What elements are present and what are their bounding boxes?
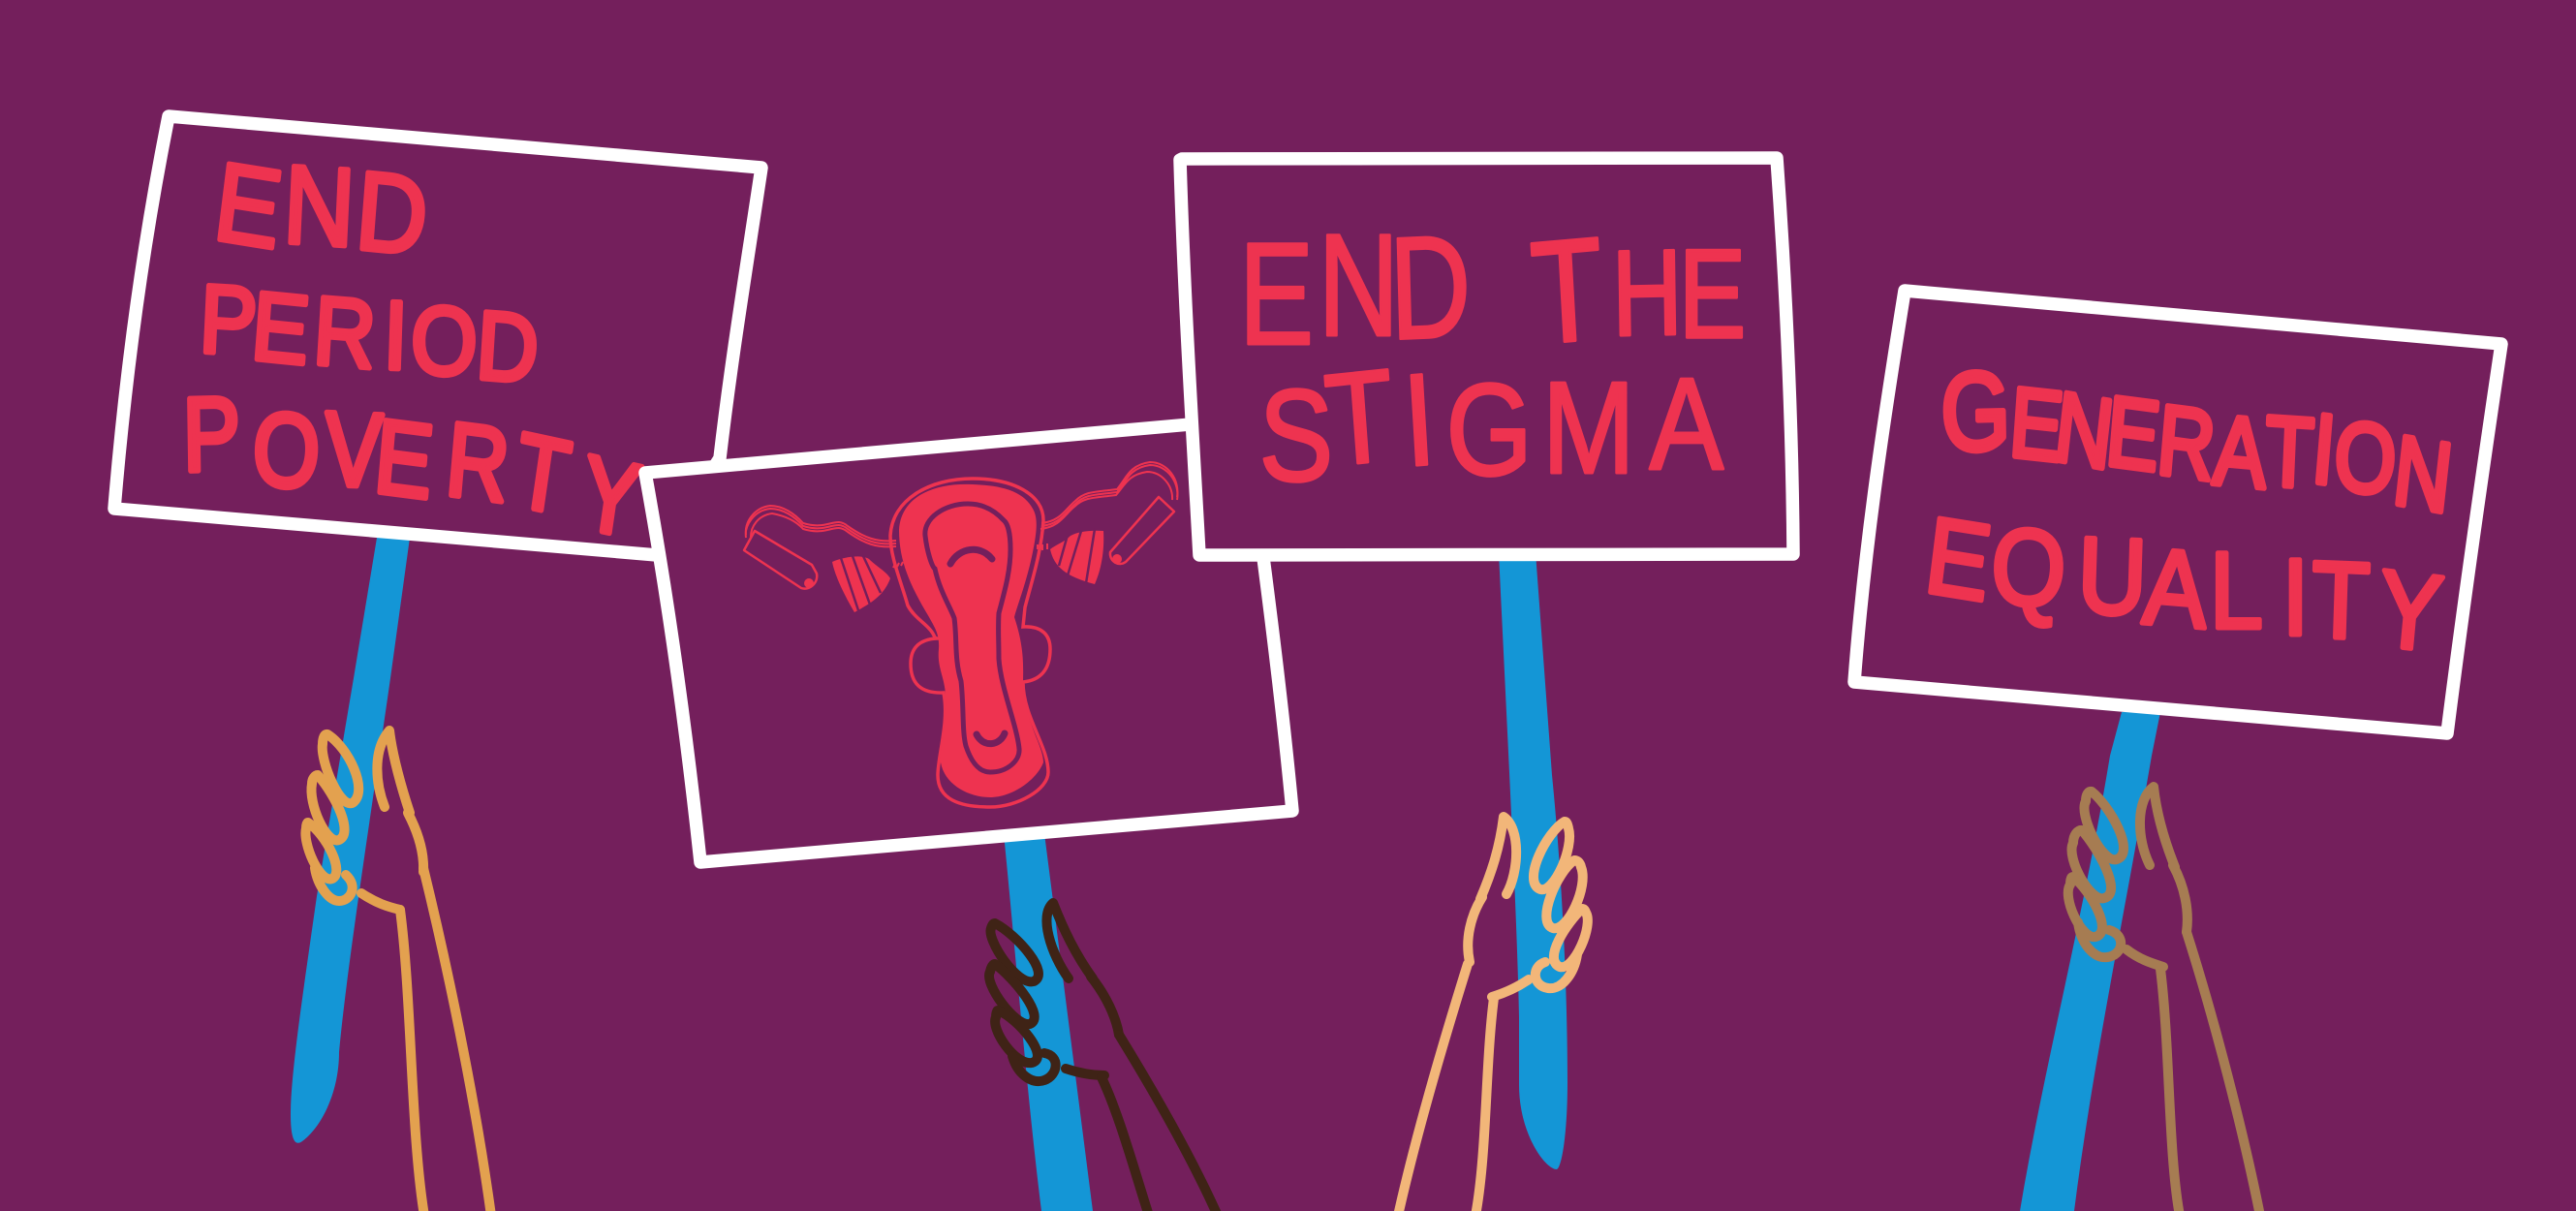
sign 3: End the Stigma [1180, 158, 1793, 555]
sign 1: End Period Poverty [114, 116, 761, 560]
sign 2 frame [645, 419, 1292, 862]
right menstrual cup [1038, 529, 1103, 584]
sign 1 lettering [182, 139, 647, 560]
stick: sign 1 [291, 538, 410, 1143]
sign 1 frame [114, 116, 761, 555]
pad bottom arc [977, 733, 1005, 744]
right tube strings [1040, 462, 1177, 529]
pad inner line [925, 504, 1019, 772]
sign 3 lettering: H [1611, 225, 1683, 360]
sign 3 lettering: T [1527, 206, 1607, 375]
hand 2 [989, 903, 1218, 1211]
sign 4 lettering: G [1940, 350, 2011, 475]
sign 4 lettering: EQUALITY [1919, 495, 2447, 675]
right tampon [1110, 497, 1174, 564]
sign 4 lettering [1919, 350, 2458, 675]
pad top arc [950, 549, 992, 564]
left menstrual cup [832, 556, 903, 612]
left tampon [744, 531, 817, 589]
sign 3 lettering [1239, 205, 1746, 509]
sign 1 lettering: POVERTY [182, 375, 647, 560]
sign 1 lettering: END [208, 139, 432, 279]
pad outer outline [890, 479, 1050, 807]
sign 3 lettering: STIGMA [1259, 342, 1723, 509]
pad body [899, 484, 1043, 797]
sign 1 lettering: PERIOD [198, 264, 542, 403]
stick: sign 2 [1004, 833, 1093, 1211]
sign 3 frame [1180, 158, 1793, 555]
sign 4 frame [1854, 291, 2501, 733]
sign 2: uterus emblem [645, 419, 1292, 862]
left tube strings [746, 506, 896, 546]
hand 3 [1398, 817, 1588, 1211]
hand 1 [305, 730, 491, 1211]
sign 3 lettering: END [1239, 205, 1473, 375]
sign 4: Generation Equality [1854, 291, 2501, 733]
stick: sign 3 [1499, 552, 1567, 1169]
sign 3 lettering: E [1679, 223, 1746, 364]
uterus made of period products [744, 462, 1177, 807]
sign 4 lettering: ENERATION [2006, 366, 2458, 534]
stick: sign 4 [2020, 712, 2160, 1211]
hand 4 [2068, 787, 2260, 1211]
